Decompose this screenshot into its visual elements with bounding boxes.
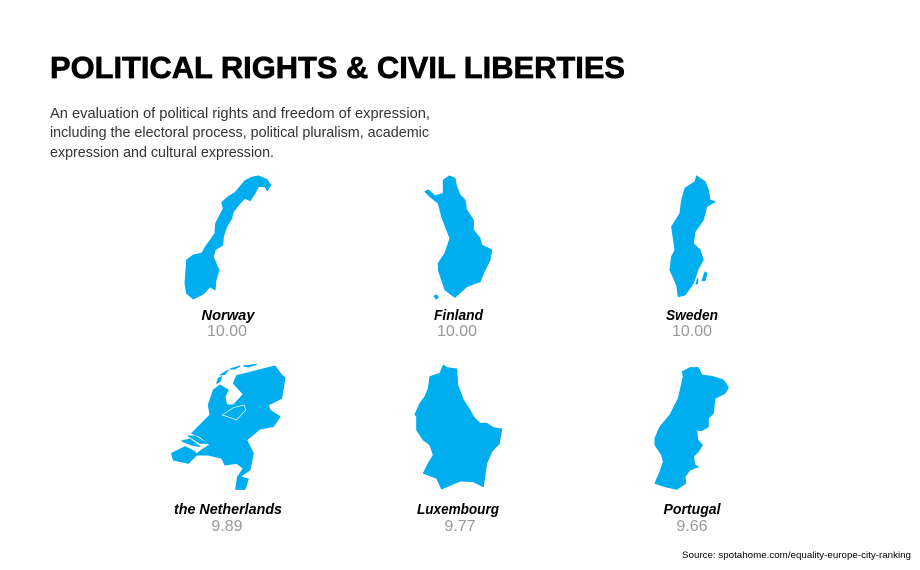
intro text: including the electoral process, political pluralism, academic xyxy=(50,125,429,141)
score: Portugal: 9.66 xyxy=(676,518,708,535)
score: Finland: 10.00 xyxy=(437,323,477,340)
label: the Netherlands: the Netherlands xyxy=(174,501,282,518)
score: Sweden: 10.00 xyxy=(672,323,712,340)
score: Norway: 10.00 xyxy=(207,323,247,340)
label: Norway: Norway xyxy=(202,307,255,324)
intro text xyxy=(50,106,430,161)
label: Portugal: Portugal xyxy=(664,501,721,518)
panel: the Netherlands xyxy=(172,364,285,535)
map: the Netherlands xyxy=(172,364,285,489)
source note: Source: spotahome.com/equality-europe-city-ranking xyxy=(682,550,911,561)
panel: Portugal xyxy=(655,368,728,535)
intro text: expression and cultural expression. xyxy=(50,145,274,161)
map: Luxembourg xyxy=(415,365,502,489)
label: Finland: Finland xyxy=(434,307,484,324)
map: Norway xyxy=(185,176,271,299)
map: Portugal xyxy=(655,368,728,489)
map: Sweden xyxy=(670,176,715,297)
panel: Luxembourg xyxy=(415,365,502,535)
panel: Finland xyxy=(425,176,492,340)
panel: Sweden xyxy=(666,176,718,340)
label: Luxembourg: Luxembourg xyxy=(417,501,499,518)
label: Sweden: Sweden xyxy=(666,307,718,324)
score: the Netherlands: 9.89 xyxy=(211,518,243,535)
intro text: An evaluation of political rights and freedom of expression, xyxy=(50,106,430,122)
map: Finland xyxy=(425,176,492,299)
panel: Norway xyxy=(185,176,271,340)
title: POLITICAL RIGHTS & CIVIL LIBERTIES xyxy=(50,50,625,85)
score: Luxembourg: 9.77 xyxy=(444,518,476,535)
